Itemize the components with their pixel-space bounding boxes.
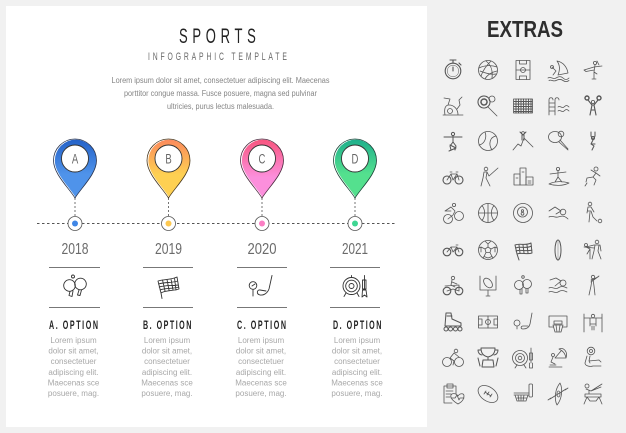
divider lines <box>49 268 380 308</box>
option C <box>235 319 287 398</box>
pin A <box>54 139 97 198</box>
icon: swimming pool <box>549 98 569 115</box>
icon: martial arts <box>584 240 601 259</box>
option D <box>331 319 383 398</box>
icon: swimming <box>549 278 567 293</box>
icon: surfboard <box>555 240 561 260</box>
icon: windsurfing <box>548 61 569 82</box>
icon: road cyclist <box>442 349 464 366</box>
icon: fencing <box>481 167 498 186</box>
option B: Maecenas sce <box>141 378 193 387</box>
pin D: D <box>352 151 359 167</box>
marker B <box>162 216 176 230</box>
option A: Lorem ipsum <box>50 336 97 345</box>
intro text: ultricies, purus lectus malesuada. <box>167 102 274 111</box>
subtitle: INFOGRAPHIC TEMPLATE <box>148 50 287 62</box>
timeline <box>37 198 396 224</box>
title: SPORTS <box>179 24 256 48</box>
option A: posuere, mag. <box>48 389 99 398</box>
marker A <box>68 216 82 230</box>
icon: weightlifting arm <box>585 347 601 366</box>
option D: dolor sit amet, <box>332 347 382 356</box>
icon: trophy <box>478 348 498 367</box>
icon: badminton racket <box>548 131 568 150</box>
option B <box>141 319 193 398</box>
icon: football goal <box>480 276 496 296</box>
icon: city bike <box>443 245 463 256</box>
option B: adipiscing elit. <box>142 368 192 377</box>
icon: soccer ball <box>478 240 498 260</box>
option B: Lorem ipsum <box>144 336 190 345</box>
icon: medical clipboard <box>444 384 464 404</box>
option B: dolor sit amet, <box>142 347 192 356</box>
pin D <box>334 139 377 198</box>
icon: stopwatch <box>445 60 461 79</box>
option C: posuere, mag. <box>235 389 287 398</box>
icon: golfer <box>589 275 599 295</box>
option A: adipiscing elit. <box>48 368 99 377</box>
option A: Maecenas sce <box>48 378 100 387</box>
icon: volleyball <box>478 60 498 80</box>
icon: gymnast <box>591 132 595 150</box>
year 2020: 2020 <box>248 241 277 258</box>
icon: kitesurfing <box>549 349 567 367</box>
icon: roller skate <box>444 313 462 331</box>
year 2018: 2018 <box>62 241 88 258</box>
icon: podium <box>514 168 533 185</box>
icon: target and dart <box>512 348 532 368</box>
icon: basketball <box>478 204 498 222</box>
year 2021: 2021 <box>342 241 368 258</box>
icon: kayak <box>548 383 568 405</box>
option D: posuere, mag. <box>331 389 383 398</box>
icon: skier jump <box>444 132 462 151</box>
icon: pull up bar <box>584 314 602 332</box>
option A: consectetuer <box>51 357 97 366</box>
option D: Lorem ipsum <box>334 336 380 345</box>
option D: Maecenas sce <box>331 378 383 387</box>
panel: main infographic <box>6 6 427 427</box>
icon: football pitch <box>478 316 498 328</box>
intro text <box>112 76 330 111</box>
pin B: B <box>165 151 172 167</box>
option D: D. OPTION <box>333 319 381 333</box>
marker D <box>348 216 362 230</box>
option C: C. OPTION <box>237 319 286 333</box>
option A <box>48 319 100 398</box>
icon: runner <box>585 167 600 186</box>
icon: checkered flag <box>158 277 179 298</box>
option B: consectetuer <box>144 357 190 366</box>
icon: race flag <box>515 243 532 260</box>
marker C <box>255 216 269 230</box>
icon: american football <box>475 382 501 406</box>
option C: Maecenas sce <box>235 378 287 387</box>
option C: Lorem ipsum <box>238 336 284 345</box>
icon: basket on board <box>514 384 532 401</box>
option B: posuere, mag. <box>141 389 193 398</box>
option D: consectetuer <box>334 357 380 366</box>
option D: adipiscing elit. <box>332 368 382 377</box>
icon: basketball hoop <box>549 316 567 332</box>
pin A: A <box>72 151 78 167</box>
icon: table tennis <box>64 275 86 296</box>
option A: dolor sit amet, <box>48 347 99 356</box>
icon: ballet <box>584 61 602 79</box>
icon: mountain climbing <box>513 132 533 150</box>
icon: tennis ball <box>478 132 498 150</box>
icon: archery target <box>343 276 367 297</box>
icon: cheerleader <box>585 96 601 115</box>
pin C <box>240 139 284 198</box>
intro text: Lorem ipsum dolor sit amet, consectetuer adipiscing elit. Maecenas <box>112 76 330 85</box>
icon: soccer field <box>516 60 530 80</box>
option C: dolor sit amet, <box>236 347 286 356</box>
extras heading: EXTRAS <box>487 16 563 42</box>
icon: exercise bike <box>443 97 463 115</box>
pin B <box>147 139 190 198</box>
year 2019: 2019 <box>155 241 182 258</box>
icon: billiard ball <box>514 204 532 222</box>
icon: swimmer <box>549 207 568 219</box>
option C: adipiscing elit. <box>236 368 286 377</box>
icon: soccer player <box>587 202 602 223</box>
icon: motorbike rider <box>443 276 463 295</box>
icon: golf club small <box>514 313 532 329</box>
icon: pommel horse gymnast <box>584 384 602 404</box>
icon: surfer <box>549 167 569 185</box>
option A: A. OPTION <box>49 319 98 333</box>
pin C: C <box>259 151 266 167</box>
icon: ping pong <box>514 276 532 294</box>
option C: consectetuer <box>238 357 284 366</box>
icon: sports net <box>514 99 532 113</box>
icon: cyclist <box>444 203 464 224</box>
icon: tennis racket <box>478 96 497 116</box>
intro text: porttitor congue massa. Fusce posuere, magna sed pulvinar <box>124 89 317 98</box>
icon: golf club <box>249 276 272 296</box>
icon: bicycle <box>443 172 463 184</box>
option B: B. OPTION <box>143 319 191 333</box>
